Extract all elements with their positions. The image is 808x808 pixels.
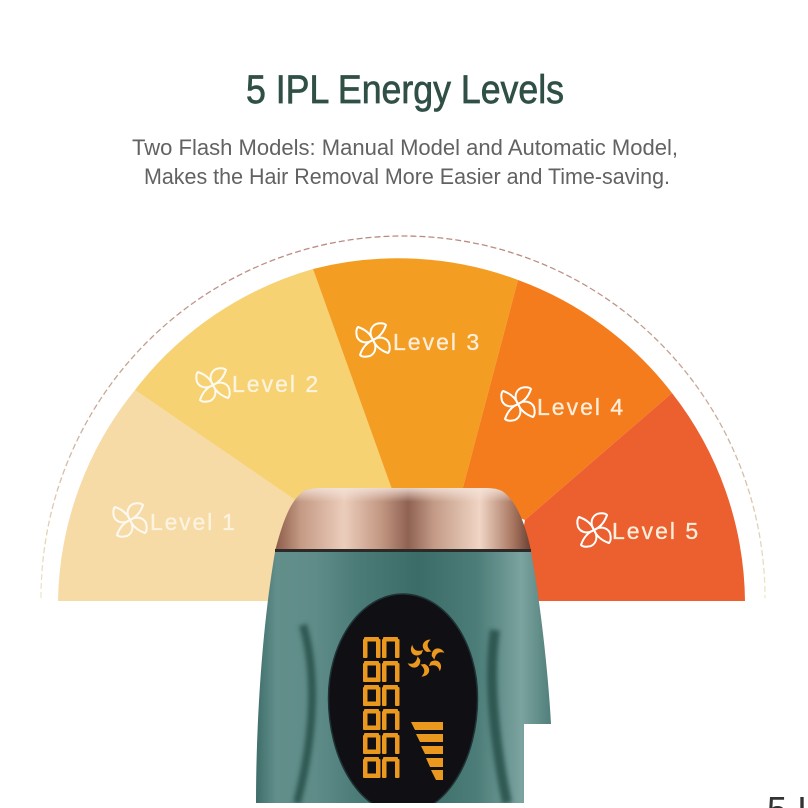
icon: fan level 4 [501,387,535,421]
segment: level 1 [58,390,300,601]
panel: energy level fan chart [58,258,745,601]
label: level 3: Level 3 [393,329,481,355]
title: 5 IPL Energy Levels [246,68,564,112]
dashed arc outline [41,236,765,598]
device: IPL handset [256,488,551,808]
label: level 4 [501,387,625,421]
body grooves [297,625,507,803]
LCD digits [363,637,400,778]
label: level 5: Level 5 [612,518,700,544]
label: level 5 [577,513,700,547]
white corner patch [524,724,564,808]
label: level 2 [196,368,320,402]
LCD level bars [411,722,443,780]
segment: level 5 [510,393,745,601]
label: level 2: Level 2 [232,371,320,397]
label: level 4: Level 4 [537,394,625,420]
subtitle text [132,135,678,189]
icon: fan level 5 [577,513,611,547]
segment: level 3 [313,258,518,495]
label: level 1 [113,503,237,537]
label: level 3 [356,323,481,357]
label: level 1: Level 1 [150,509,237,535]
segment: level 2 [135,269,394,510]
icon: fan level 2 [196,368,230,402]
handset body [256,552,551,803]
LCD fan icon [401,633,451,683]
icon: fan level 1 [113,503,147,537]
icon: fan level 3 [356,323,390,357]
rose gold collar [275,488,531,551]
segment: level 4 [461,280,672,520]
subtitle text: Makes the Hair Removal More Easier and Time-saving. [144,164,670,189]
subtitle text: Two Flash Models: Manual Model and Automatic Model, [132,135,678,160]
LCD screen [328,594,478,808]
